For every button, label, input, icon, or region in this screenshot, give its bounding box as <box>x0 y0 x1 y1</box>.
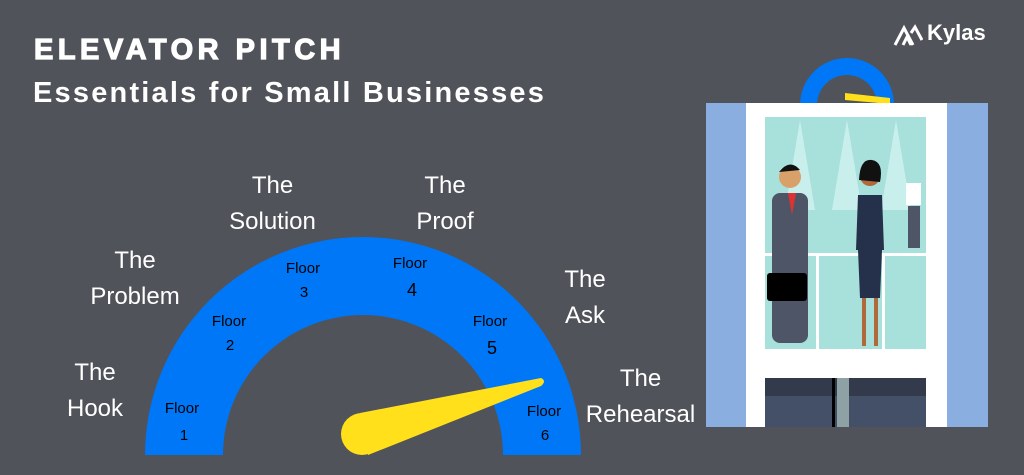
gauge: 6 <box>541 427 549 444</box>
label: proof: Proof <box>416 208 474 235</box>
label: hook: Hook <box>67 395 123 422</box>
needle <box>341 378 544 455</box>
label: solution: The <box>252 172 293 199</box>
gauge: Floor <box>473 313 507 330</box>
woman <box>860 166 880 186</box>
gauge: 2 <box>226 337 234 354</box>
label: problem: The <box>114 247 156 274</box>
gauge: Floor <box>527 403 561 420</box>
gauge: Floor <box>393 255 427 272</box>
label: ask: The <box>564 266 606 293</box>
gauge: Floor <box>165 400 199 417</box>
gauge: 3 <box>300 284 308 301</box>
subtitle: Essentials for Small Businesses <box>33 77 546 109</box>
label: solution <box>229 172 316 235</box>
label: ask <box>564 266 606 329</box>
label: rehearsal: Rehearsal <box>586 401 695 428</box>
man <box>772 193 808 343</box>
gauge: Floor <box>286 260 320 277</box>
label: rehearsal: The <box>620 365 661 392</box>
label: hook: The <box>74 359 116 386</box>
dial ring <box>800 58 894 105</box>
label: problem: Problem <box>90 283 180 310</box>
label: ask: Ask <box>565 302 605 329</box>
gauge: 5 <box>487 338 497 358</box>
label: problem <box>90 247 180 310</box>
gauge: Floor <box>212 313 246 330</box>
gauge: 1 <box>180 427 188 444</box>
label: rehearsal <box>586 365 695 428</box>
label: solution: Solution <box>229 208 316 235</box>
logo: Kylas <box>927 20 986 45</box>
title: ELEVATOR PITCH <box>34 34 345 66</box>
label: proof <box>416 172 474 235</box>
gauge: 4 <box>407 280 417 300</box>
label: proof: The <box>424 172 466 199</box>
label: hook <box>67 359 123 422</box>
logo <box>894 20 986 46</box>
